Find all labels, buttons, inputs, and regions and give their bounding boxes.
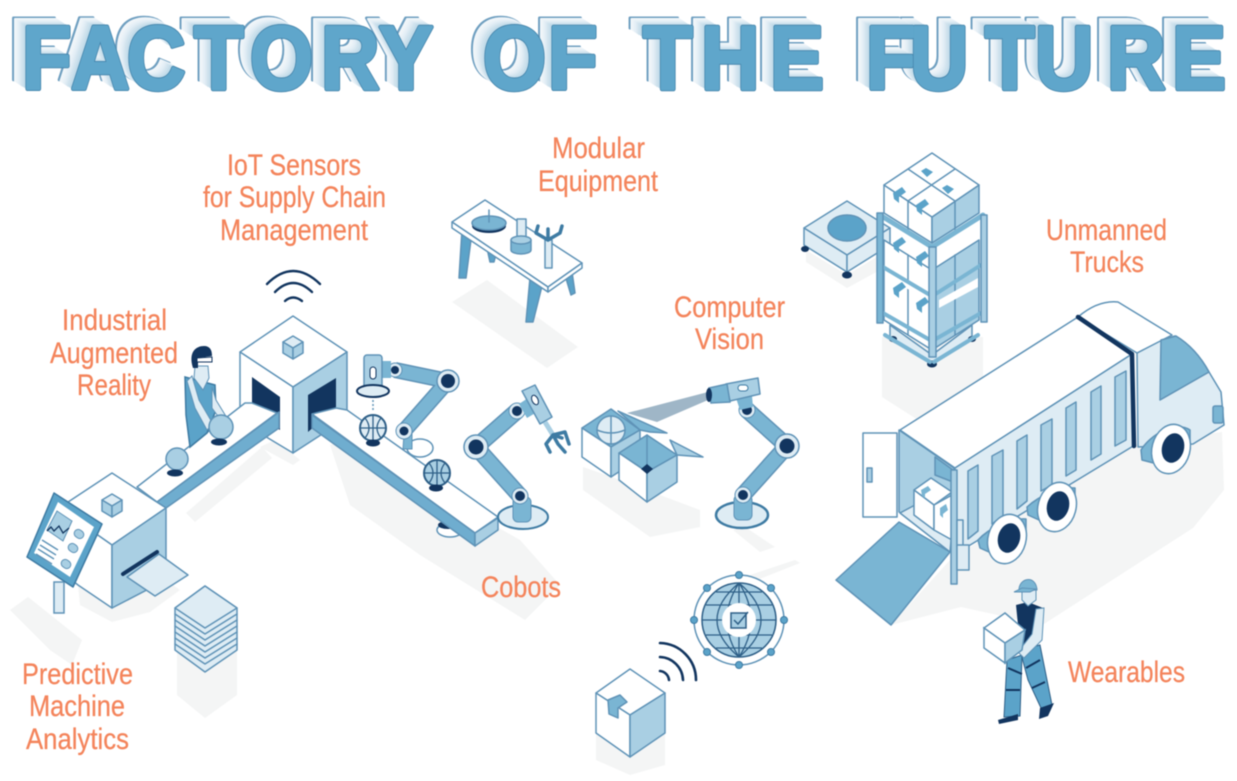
truck interior boxes <box>914 478 952 540</box>
title: Factory of the Future: FACTORY OF THE FUTURE <box>14 3 1218 104</box>
label: Predictive Machine Analytics: Predictive <box>22 658 133 691</box>
label: Wearables: Wearables <box>1068 656 1185 689</box>
label: Modular Equipment: Equipment <box>538 165 659 198</box>
truck cargo roof <box>900 317 1132 468</box>
truck ramp <box>836 522 950 625</box>
label: Modular Equipment: Modular <box>552 132 645 165</box>
truck rear post <box>951 470 957 584</box>
label: Modular Equipment <box>538 132 659 198</box>
label: Industrial Augmented Reality: Industrial <box>62 304 167 337</box>
label: IoT Sensors for Supply Chain Management <box>203 149 386 247</box>
cobot arm: computer vision camera <box>706 378 799 528</box>
cylinder tool <box>511 219 531 254</box>
cobot arm: gripper <box>464 385 569 529</box>
title: Factory of the Future: FACTORY OF THE FUTURE <box>19 6 1223 107</box>
label: Predictive Machine Analytics: Machine <box>29 690 125 723</box>
box with sphere being inspected <box>582 409 667 477</box>
truck side ribs <box>968 371 1126 539</box>
icon: wifi signal above scanner <box>267 271 320 301</box>
truck <box>836 302 1224 625</box>
title: Factory of the Future: FACTORY OF THE FUTURE <box>8 0 1212 100</box>
tracked box <box>596 669 665 757</box>
conveyor: right belt <box>312 408 498 546</box>
truck interior <box>899 430 954 540</box>
truck windshield <box>1160 336 1209 400</box>
label: IoT Sensors for Supply Chain Management: Management <box>220 214 369 247</box>
icon: small cube on scanner <box>283 336 303 359</box>
cobot arm: upper with camera head <box>357 355 459 457</box>
modular equipment table <box>452 200 582 322</box>
conveyor: left belt <box>137 403 279 508</box>
icon: printer slot and paper <box>123 552 188 596</box>
title: Factory of the Future: FACTORY OF THE FUTURE <box>15 4 1220 105</box>
rear wheel 2 <box>978 510 1032 568</box>
rack: scale platform <box>801 201 890 278</box>
label: Computer Vision: Vision <box>695 323 764 356</box>
rear wheel 1 <box>1027 478 1082 536</box>
label: IoT Sensors for Supply Chain Management: for Supply Chain <box>203 181 386 214</box>
title: Factory of the Future: FACTORY OF THE FUTURE <box>11 1 1215 102</box>
label: Predictive Machine Analytics: Analytics <box>26 723 129 756</box>
conveyor: base under right belt <box>437 521 463 537</box>
gripper tool <box>536 226 562 268</box>
white box tops on shelves <box>886 228 978 308</box>
rack frame <box>877 213 987 362</box>
front wheel <box>1141 420 1196 478</box>
sphere under inspection <box>360 415 386 446</box>
rack of boxes <box>877 153 987 368</box>
label: Computer Vision: Computer <box>674 291 785 324</box>
label: Unmanned Trucks <box>1046 214 1167 279</box>
ground shadows <box>10 250 1224 775</box>
label: Industrial Augmented Reality <box>50 304 178 402</box>
title: Factory of the Future: FACTORY OF THE FUTURE <box>22 8 1226 109</box>
ball on conveyor <box>166 448 188 476</box>
label: Industrial Augmented Reality: Reality <box>77 369 151 402</box>
label: Predictive Machine Analytics <box>22 658 133 756</box>
monitor with post <box>27 493 102 613</box>
vision beam <box>627 392 708 422</box>
worker carrying box, wearables <box>984 580 1054 724</box>
worker with AR headset <box>185 346 233 447</box>
icon: wifi waves from box <box>660 643 696 680</box>
open box <box>619 435 703 502</box>
title: Factory of the Future: FACTORY OF THE FUTURE <box>9 0 1214 101</box>
label: IoT Sensors for Supply Chain Management: IoT Sensors <box>227 149 361 182</box>
label: Unmanned Trucks: Unmanned <box>1046 214 1167 247</box>
label: Computer Vision <box>674 291 785 356</box>
title: Factory of the Future: FACTORY OF THE FUTURE <box>17 5 1221 106</box>
truck cargo side <box>955 354 1135 553</box>
machine: predictive printer <box>59 473 188 608</box>
label: Cobots: Cobots <box>481 571 561 604</box>
ball held by worker <box>209 415 233 439</box>
sphere on right conveyor <box>424 460 450 492</box>
scanner cube <box>240 316 347 453</box>
box tapes <box>893 168 954 313</box>
truck door <box>863 433 897 517</box>
truck cab <box>1137 336 1224 447</box>
disc tool <box>472 210 506 233</box>
paper stack <box>175 586 237 672</box>
icon: small cube on machine <box>102 494 122 517</box>
title: Factory of the Future: FACTORY OF THE FUTURE <box>22 8 1226 109</box>
label: Industrial Augmented Reality: Augmented <box>50 337 178 370</box>
title: Factory of the Future: FACTORY OF THE FUTURE <box>12 2 1217 103</box>
globe network <box>690 572 788 668</box>
label: Unmanned Trucks: Trucks <box>1070 246 1144 279</box>
